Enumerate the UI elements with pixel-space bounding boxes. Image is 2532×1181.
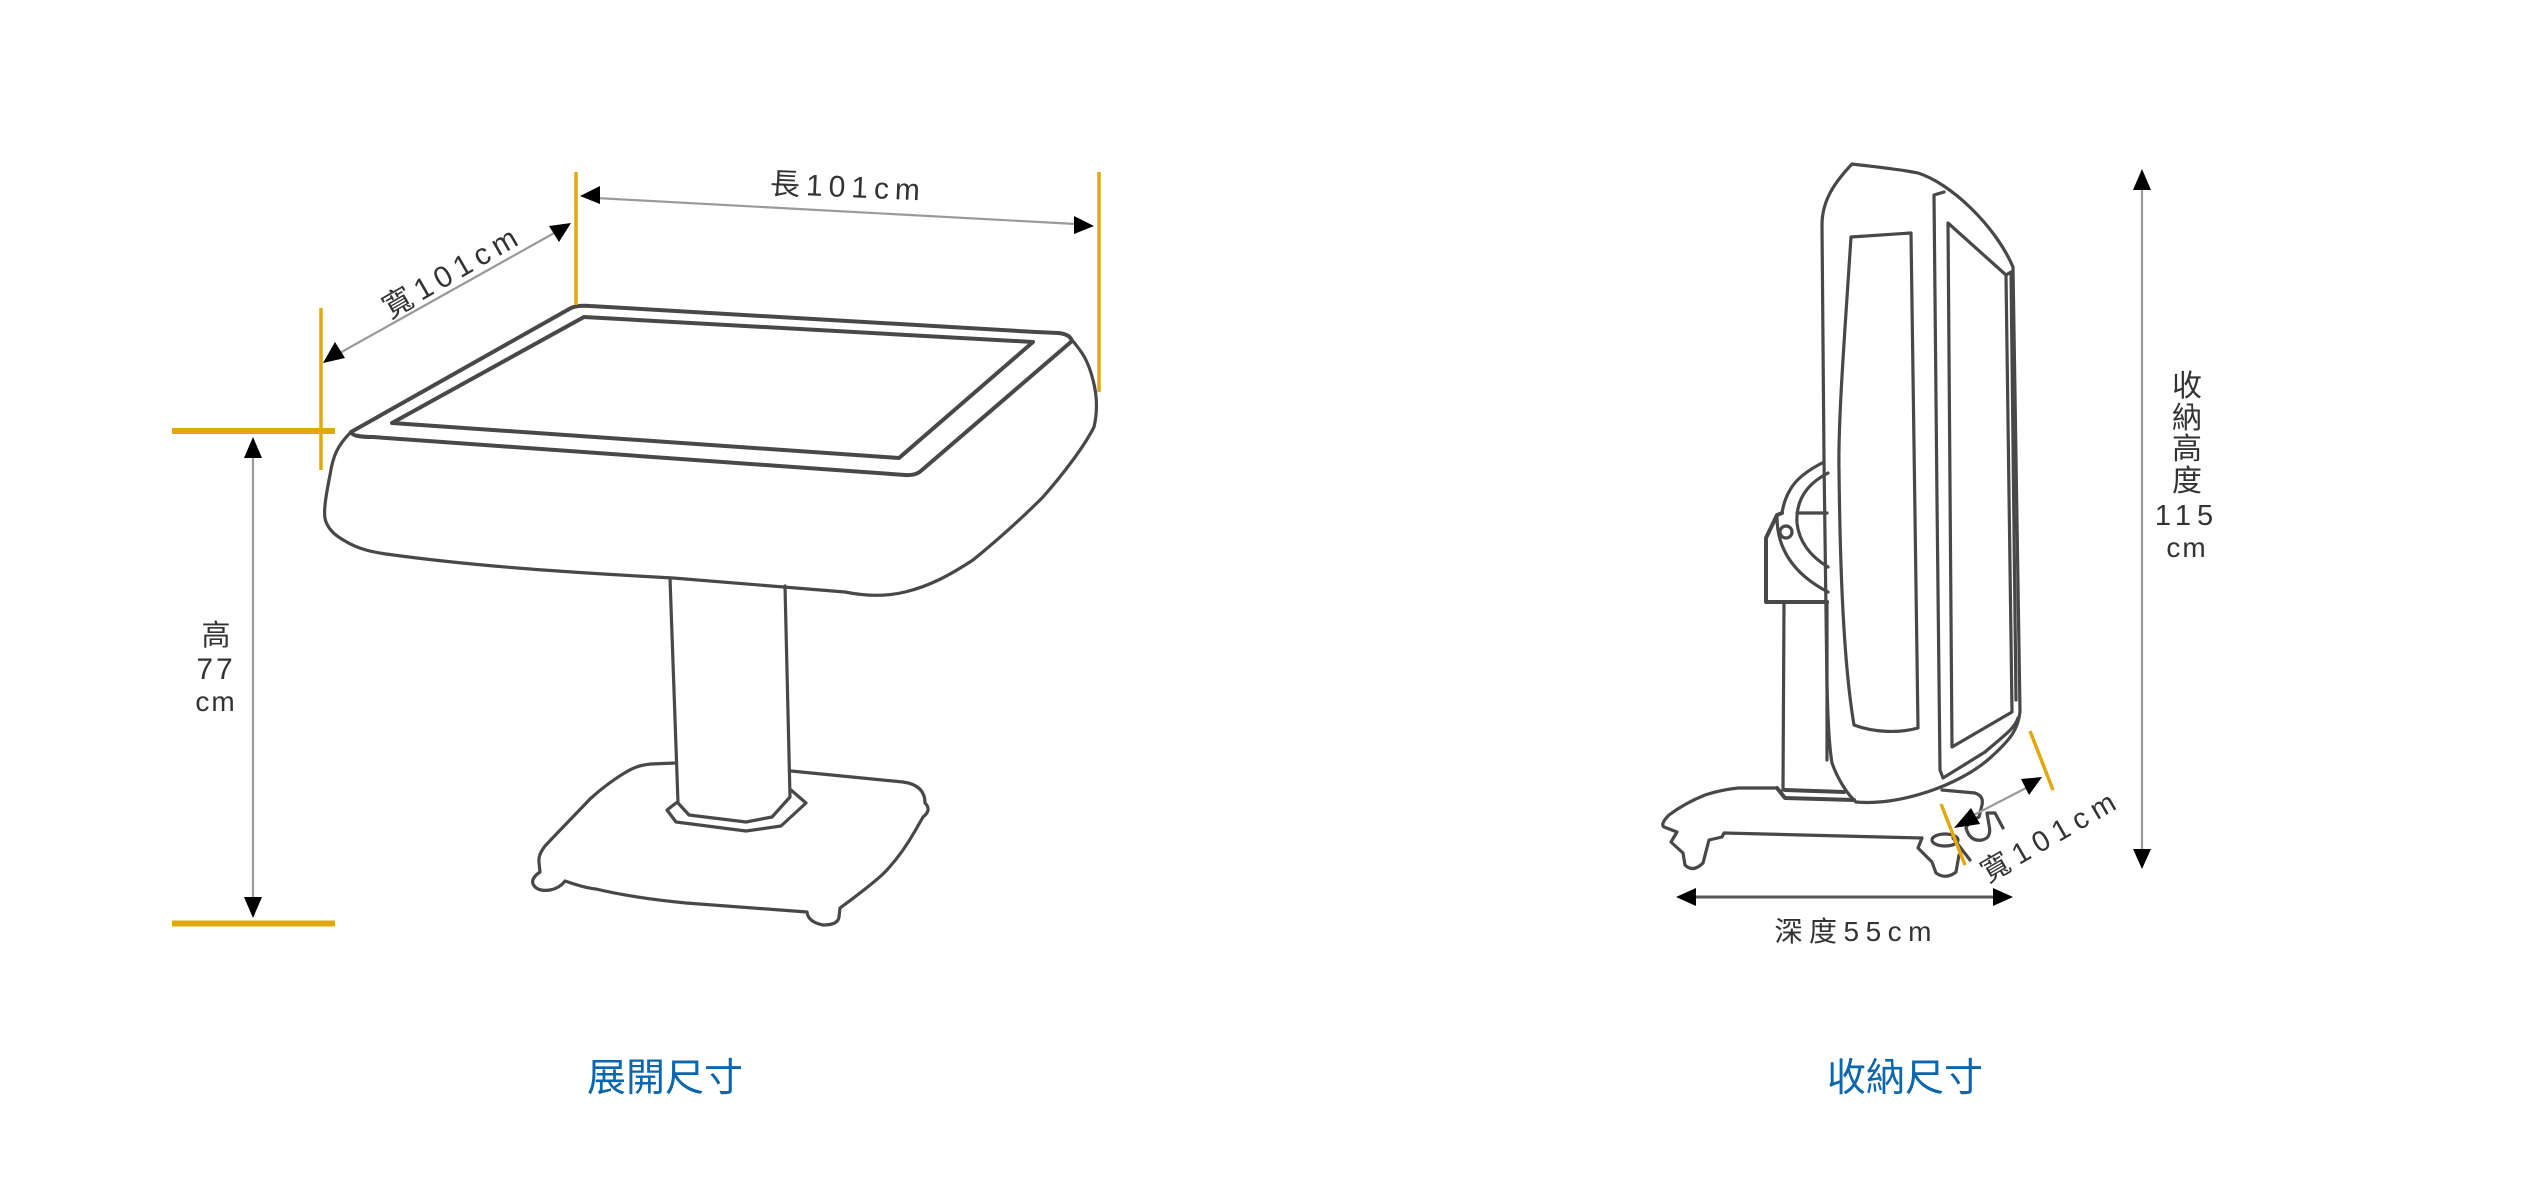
character 3: 高 bbox=[2172, 433, 2202, 466]
height number: 115 bbox=[2155, 500, 2219, 532]
heading: unfolded size: 展開尺寸 bbox=[587, 1057, 743, 1100]
pillar collar bbox=[667, 790, 806, 831]
illustration: folded table side view bbox=[1663, 164, 2020, 876]
arrow: width bbox=[1954, 777, 2042, 828]
height character: 高 bbox=[201, 619, 231, 652]
hinge arc 2 bbox=[1777, 515, 1828, 592]
label: length 101cm: 長101cm bbox=[769, 168, 921, 207]
panel inner frame bbox=[1948, 223, 2012, 747]
hinge inner arc bbox=[1797, 473, 1828, 567]
table body bbox=[325, 340, 1097, 595]
arrow: height bbox=[244, 437, 262, 918]
caster edge bbox=[1953, 838, 1970, 860]
post foot plate bbox=[1777, 788, 1854, 800]
character 4: 度 bbox=[2172, 465, 2202, 498]
label: width 101cm: 寬101cm bbox=[1975, 786, 2121, 889]
table top inner frame bbox=[392, 317, 1033, 458]
hinge block bbox=[1766, 513, 1827, 602]
arrow: length bbox=[580, 186, 1094, 234]
height unit: cm bbox=[2166, 532, 2208, 563]
panel: unfolded table dimensions bbox=[172, 168, 1099, 1100]
base plate bbox=[533, 763, 928, 925]
pillar bbox=[670, 578, 790, 822]
hinge bar bbox=[1797, 511, 1827, 515]
arrow: width bbox=[323, 223, 571, 363]
panel right edge double line bbox=[2006, 272, 2016, 700]
label: width 101cm: 寬101cm bbox=[377, 222, 523, 325]
height number: 77 bbox=[196, 653, 236, 686]
illustration: unfolded table bbox=[325, 306, 1097, 925]
yellow guide lines bbox=[172, 172, 1099, 924]
side recess bbox=[1839, 233, 1918, 731]
wheeled base bbox=[1663, 788, 1959, 876]
height unit: cm bbox=[195, 686, 237, 717]
panel: folded table dimensions bbox=[1663, 164, 2219, 1100]
hinge pin bbox=[1780, 526, 1792, 538]
label: height 77cm bbox=[195, 619, 237, 717]
table top rim bbox=[351, 306, 1072, 475]
arrow: folded height bbox=[2133, 169, 2151, 869]
caster bbox=[1932, 834, 1958, 846]
rear leg bbox=[1942, 790, 2003, 840]
post bbox=[1783, 602, 1827, 790]
label: folded height 115cm bbox=[2155, 370, 2219, 563]
label: depth 55cm: 深度55cm bbox=[1774, 916, 1932, 947]
panel edge bbox=[1934, 192, 2018, 778]
top shell bbox=[1822, 164, 2020, 802]
yellow guide ticks bbox=[1941, 731, 2053, 865]
character 2: 納 bbox=[2172, 402, 2202, 435]
arrow: depth bbox=[1676, 888, 2013, 906]
hinge outer arc bbox=[1782, 462, 1824, 513]
character 1: 收 bbox=[2172, 370, 2202, 403]
heading: folded size: 收納尺寸 bbox=[1827, 1057, 1983, 1100]
